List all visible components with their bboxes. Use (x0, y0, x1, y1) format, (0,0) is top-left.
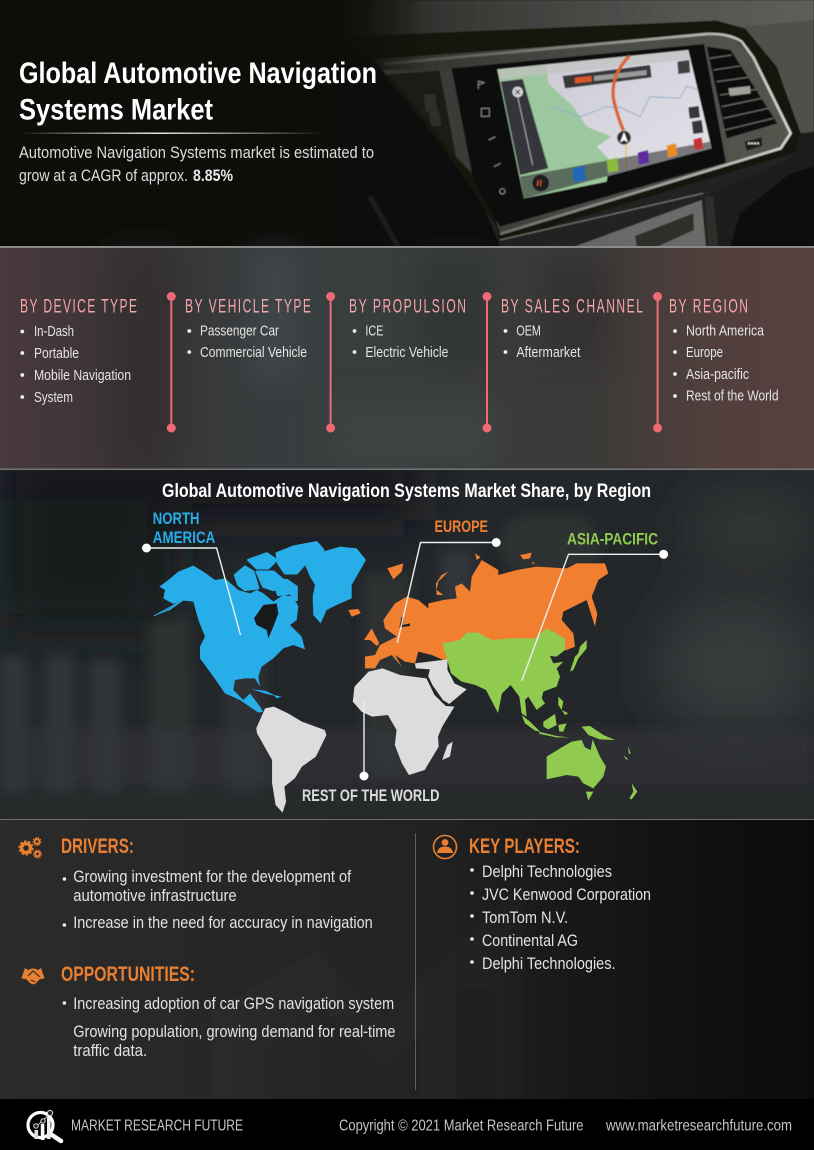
key players list (470, 863, 651, 973)
map region: europe and russia (364, 553, 608, 668)
segment: by sales channel: OEM (516, 324, 541, 340)
background arrow watermark (212, 880, 525, 1099)
panel: market segments (0, 246, 814, 470)
map region: iceland (348, 609, 361, 617)
segment: by sales channel: BY SALES CHANNEL (501, 296, 643, 317)
hudson bay (254, 603, 278, 638)
segment: by device type (20, 296, 137, 406)
segment: by vehicle type: BY VEHICLE TYPE (185, 296, 311, 317)
intro text (19, 143, 374, 185)
side buttons (478, 81, 501, 167)
map region: oceania (522, 697, 637, 801)
opportunities heading: OPPORTUNITIES: (61, 963, 195, 986)
map heading: Global Automotive Navigation Systems Market Share, by Region (162, 481, 651, 502)
label: rest of the world: REST OF THE WORLD (302, 786, 439, 805)
screen map (497, 50, 712, 198)
icon: logo (28, 1110, 61, 1141)
segment: by device type: Portable (34, 346, 79, 362)
segment: by region: Asia-pacific (686, 367, 749, 383)
title: Global Automotive Navigation (19, 57, 377, 90)
segment: by propulsion (349, 296, 466, 361)
icon: gears (19, 838, 41, 858)
label: north america (153, 509, 215, 547)
opportunities list (63, 995, 395, 1060)
dash top (340, 0, 814, 43)
leader: europe (397, 538, 501, 643)
panel: regional map (0, 440, 814, 832)
title (19, 57, 377, 126)
map region: rest of the world (256, 659, 467, 813)
drivers list: Growing investment for the development of (73, 868, 352, 886)
steering wheel (338, 35, 501, 247)
map region: north america (154, 542, 366, 713)
drivers list (63, 868, 373, 932)
segment: by propulsion: Electric Vehicle (365, 345, 448, 361)
segment: by region (669, 296, 778, 404)
segment: by device type: Mobile Navigation (34, 368, 131, 384)
segment: by vehicle type: Passenger Car (200, 324, 279, 340)
leader: rest of the world (360, 700, 368, 780)
key players list: JVC Kenwood Corporation (482, 886, 651, 904)
segment: by region: Rest of the World (686, 388, 778, 404)
label: north america: NORTH (153, 509, 200, 528)
lower console (573, 200, 706, 247)
opportunities list: traffic data. (73, 1042, 147, 1060)
panel: drivers, opportunities and key players (0, 820, 814, 1099)
key players list: Continental AG (482, 932, 578, 950)
segment: by device type: System (34, 390, 73, 406)
intro text: Automotive Navigation Systems market is estimated to (19, 143, 374, 162)
world map (154, 542, 637, 813)
label: asia-pacific: ASIA-PACIFIC (567, 530, 658, 549)
opportunities list: Increasing adoption of car GPS navigation system (73, 995, 394, 1013)
opportunities list: Growing population, growing demand for real-time (73, 1023, 395, 1041)
label: north america: AMERICA (153, 528, 215, 547)
left vent (390, 72, 455, 157)
key players list: Delphi Technologies (482, 863, 612, 881)
segment: by sales channel (501, 296, 643, 361)
title: Systems Market (19, 94, 213, 126)
segment: by region: North America (686, 324, 765, 340)
drivers list: automotive infrastructure (73, 887, 237, 905)
right vent (707, 47, 777, 138)
segment: by vehicle type: Commercial Vehicle (200, 345, 307, 361)
icon: people in target (434, 836, 456, 858)
drivers heading (19, 835, 134, 858)
segment: by device type: BY DEVICE TYPE (20, 296, 137, 317)
key players heading: KEY PLAYERS: (469, 835, 580, 858)
dark band (350, 21, 801, 242)
leader: north america (142, 544, 240, 635)
segment: by sales channel: Aftermarket (516, 345, 580, 361)
segment dividers (167, 292, 662, 432)
intro text: 8.85% (193, 166, 233, 185)
segment: by device type: In-Dash (34, 324, 74, 340)
panel: header photo of car navigation screen (0, 0, 814, 247)
icon: handshake (22, 968, 44, 984)
segment: by propulsion: BY PROPULSION (349, 296, 466, 317)
segment: by region: BY REGION (669, 296, 748, 317)
trim surround (373, 35, 790, 233)
key players list: Delphi Technologies. (482, 955, 616, 973)
segment: by vehicle type (185, 296, 311, 361)
brand name: MARKET RESEARCH FUTURE (71, 1118, 243, 1134)
opportunities heading (22, 963, 195, 986)
drivers heading: DRIVERS: (61, 835, 134, 858)
key players list: TomTom N.V. (482, 909, 568, 927)
key players heading (434, 835, 580, 858)
segment: by region: Europe (686, 345, 723, 361)
map region: asia pacific (442, 628, 587, 717)
copyright: Copyright © 2021 Market Research Future (339, 1118, 584, 1134)
black bezel (452, 44, 726, 227)
leader: asia-pacific (522, 550, 668, 681)
intro text: grow at a CAGR of approx. (19, 166, 188, 185)
label: europe: EUROPE (434, 517, 488, 536)
drivers list: Increase in the need for accuracy in navigation (73, 914, 373, 932)
panel: footer (0, 1099, 814, 1150)
segment: by propulsion: ICE (365, 324, 384, 340)
